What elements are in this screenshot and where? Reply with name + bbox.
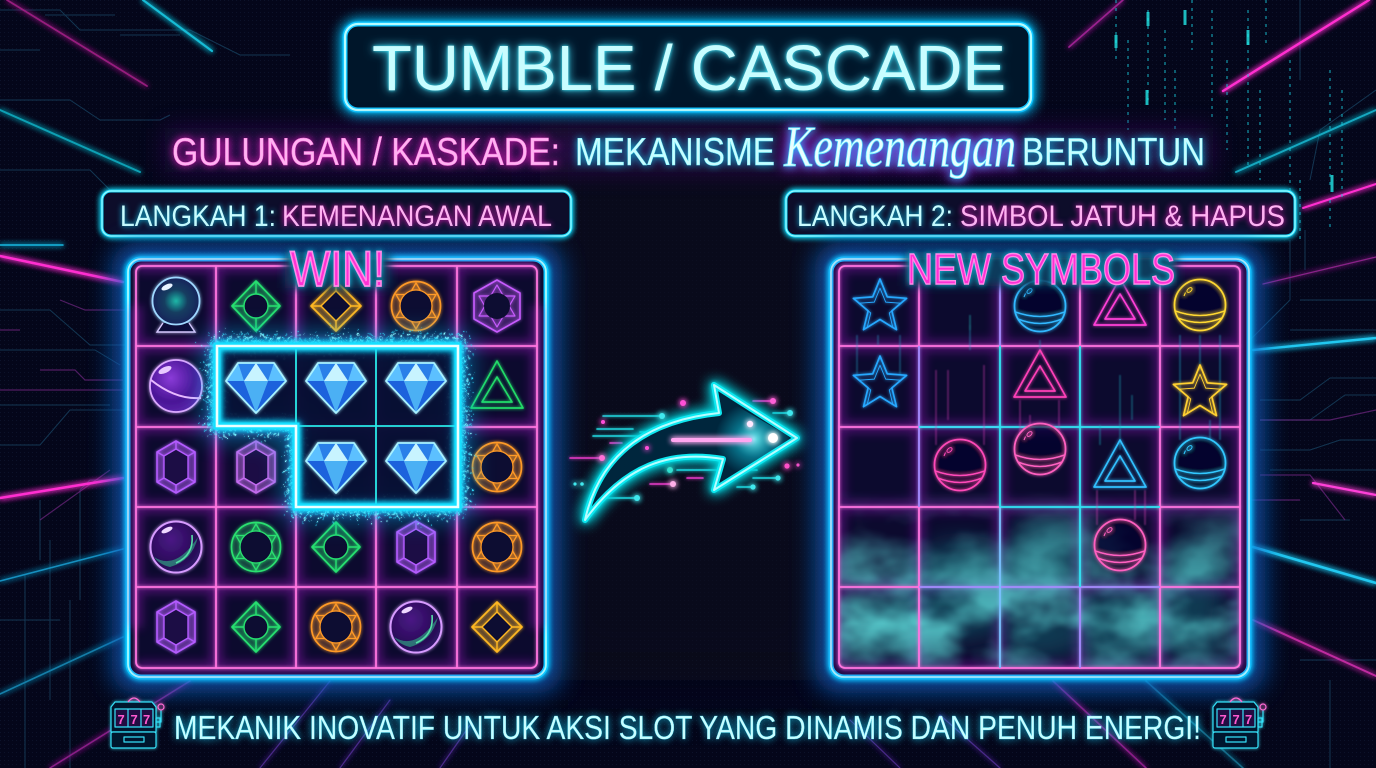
smoke — [839, 490, 1240, 668]
icon: green kite gem — [232, 602, 280, 652]
icon: orange ring gem — [472, 522, 522, 572]
icon: purple gem — [157, 441, 195, 493]
step 2 label: SIMBOL JATUH & HAPUS — [960, 200, 1285, 233]
winning cells highlight — [212, 343, 462, 510]
icon: purple orb — [150, 360, 202, 412]
icon: orange ring gem — [312, 602, 360, 652]
icon: orange ring gem — [472, 442, 522, 492]
icon: magenta triangle — [1094, 278, 1146, 325]
subtitle — [165, 114, 1213, 179]
grid lines — [136, 266, 537, 668]
subtitle: MEKANISME — [575, 131, 775, 174]
grid lines — [839, 266, 1240, 668]
icon: magenta triangle — [1014, 350, 1066, 397]
step 1 label: KEMENANGAN AWAL — [282, 200, 552, 233]
icon: blue ball — [1174, 438, 1226, 488]
falling trails — [857, 315, 1220, 525]
step 1 label — [102, 191, 571, 236]
icon: blue triangle — [1094, 440, 1146, 487]
icon: swirl orb — [150, 522, 202, 572]
diamonds — [226, 363, 446, 493]
title text: TUMBLE / CASCADE — [372, 32, 1006, 104]
icon: purple gem — [157, 601, 195, 653]
icon: swirl orb — [390, 602, 442, 652]
icon: pink ball — [1094, 520, 1146, 570]
icon: yellow gem — [472, 602, 522, 652]
icon: green kite gem — [232, 281, 280, 331]
step 2 label: LANGKAH 2: — [797, 200, 953, 233]
icon: crystal ball — [152, 278, 200, 332]
icon: purple hexagon gem — [474, 280, 520, 332]
icon: green kite gem — [312, 522, 360, 572]
icon: yellow gem — [311, 281, 361, 331]
WIN label: WIN! — [290, 241, 385, 297]
step 1 label: LANGKAH 1: — [120, 200, 276, 233]
subtitle: Kemenangan — [783, 114, 1016, 179]
smoke base — [850, 520, 1224, 663]
icon: green triangle — [471, 361, 523, 408]
icon: blue star — [853, 356, 907, 407]
footer text: MEKANIK INOVATIF UNTUK AKSI SLOT YANG DINAMIS DAN PENUH ENERGI! — [174, 709, 1201, 746]
icon: pink ball — [1014, 424, 1066, 474]
arrow body — [585, 385, 797, 520]
step 2 label — [786, 191, 1295, 236]
arrow with speed lines — [570, 385, 800, 520]
title panel — [345, 24, 1031, 110]
icon: right slot machine — [1213, 698, 1266, 748]
icon: pink ball — [934, 440, 986, 490]
icon: yellow ball — [1174, 280, 1226, 330]
icon: orange ring gem — [392, 282, 440, 330]
subtitle: BERUNTUN — [1022, 131, 1205, 174]
footer tagline — [111, 698, 1266, 748]
icon: purple gem — [237, 441, 275, 493]
icon: left slot machine — [111, 698, 164, 748]
panel: step 1 grid — [112, 241, 562, 693]
icon: blue ball — [1014, 280, 1066, 332]
icon: blue star — [853, 279, 907, 330]
NEW SYMBOLS label: NEW SYMBOLS — [907, 245, 1175, 294]
icon: yellow star — [1173, 365, 1227, 416]
icon: purple gem — [397, 521, 435, 573]
panel: step 2 grid — [815, 243, 1265, 693]
subtitle: GULUNGAN / KASKADE: — [172, 131, 560, 174]
icon: green ring gem — [232, 522, 280, 572]
